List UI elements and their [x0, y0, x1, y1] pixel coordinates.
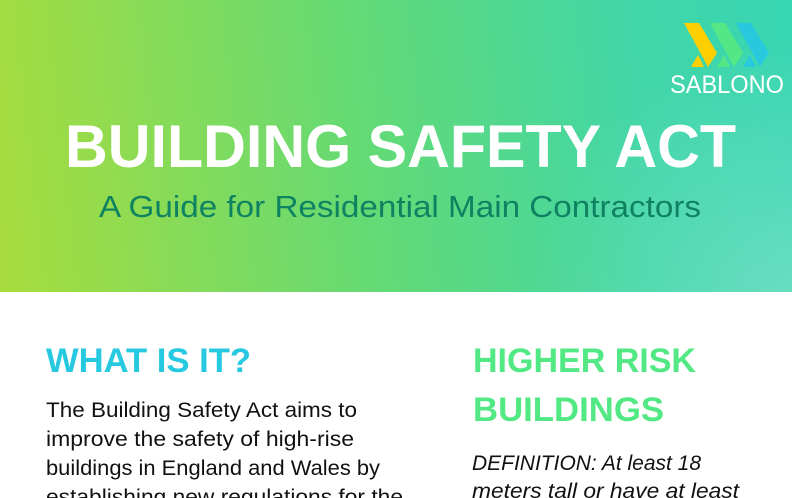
icon: yellow chevron	[684, 23, 717, 67]
text block: what is it description: buildings in England and Wales by	[46, 457, 381, 480]
heading: higher risk buildings: HIGHER RISK	[473, 342, 696, 380]
text block: definition	[472, 452, 740, 498]
subtitle: A Guide for Residential Main Contractors	[99, 190, 701, 224]
text block: what is it description	[46, 399, 403, 498]
logo wordmark: SABLONO	[670, 71, 784, 99]
logo: Sablono	[670, 23, 784, 99]
text block: what is it description: The Building Safety Act aims to	[46, 399, 357, 422]
panel: higher risk buildings	[472, 342, 740, 498]
heading: higher risk buildings: BUILDINGS	[473, 391, 664, 429]
heading: what is it: WHAT IS IT?	[46, 342, 251, 380]
icon: green chevron	[710, 23, 743, 67]
panel: what is it	[46, 342, 403, 498]
text block: definition: DEFINITION: At least 18	[472, 452, 701, 475]
header banner	[0, 0, 792, 292]
text block: what is it description: improve the safety of high-rise	[46, 428, 354, 451]
title: BUILDING SAFETY ACT	[65, 113, 736, 180]
icon: blue chevron	[736, 23, 769, 67]
heading: higher risk buildings	[473, 342, 696, 429]
